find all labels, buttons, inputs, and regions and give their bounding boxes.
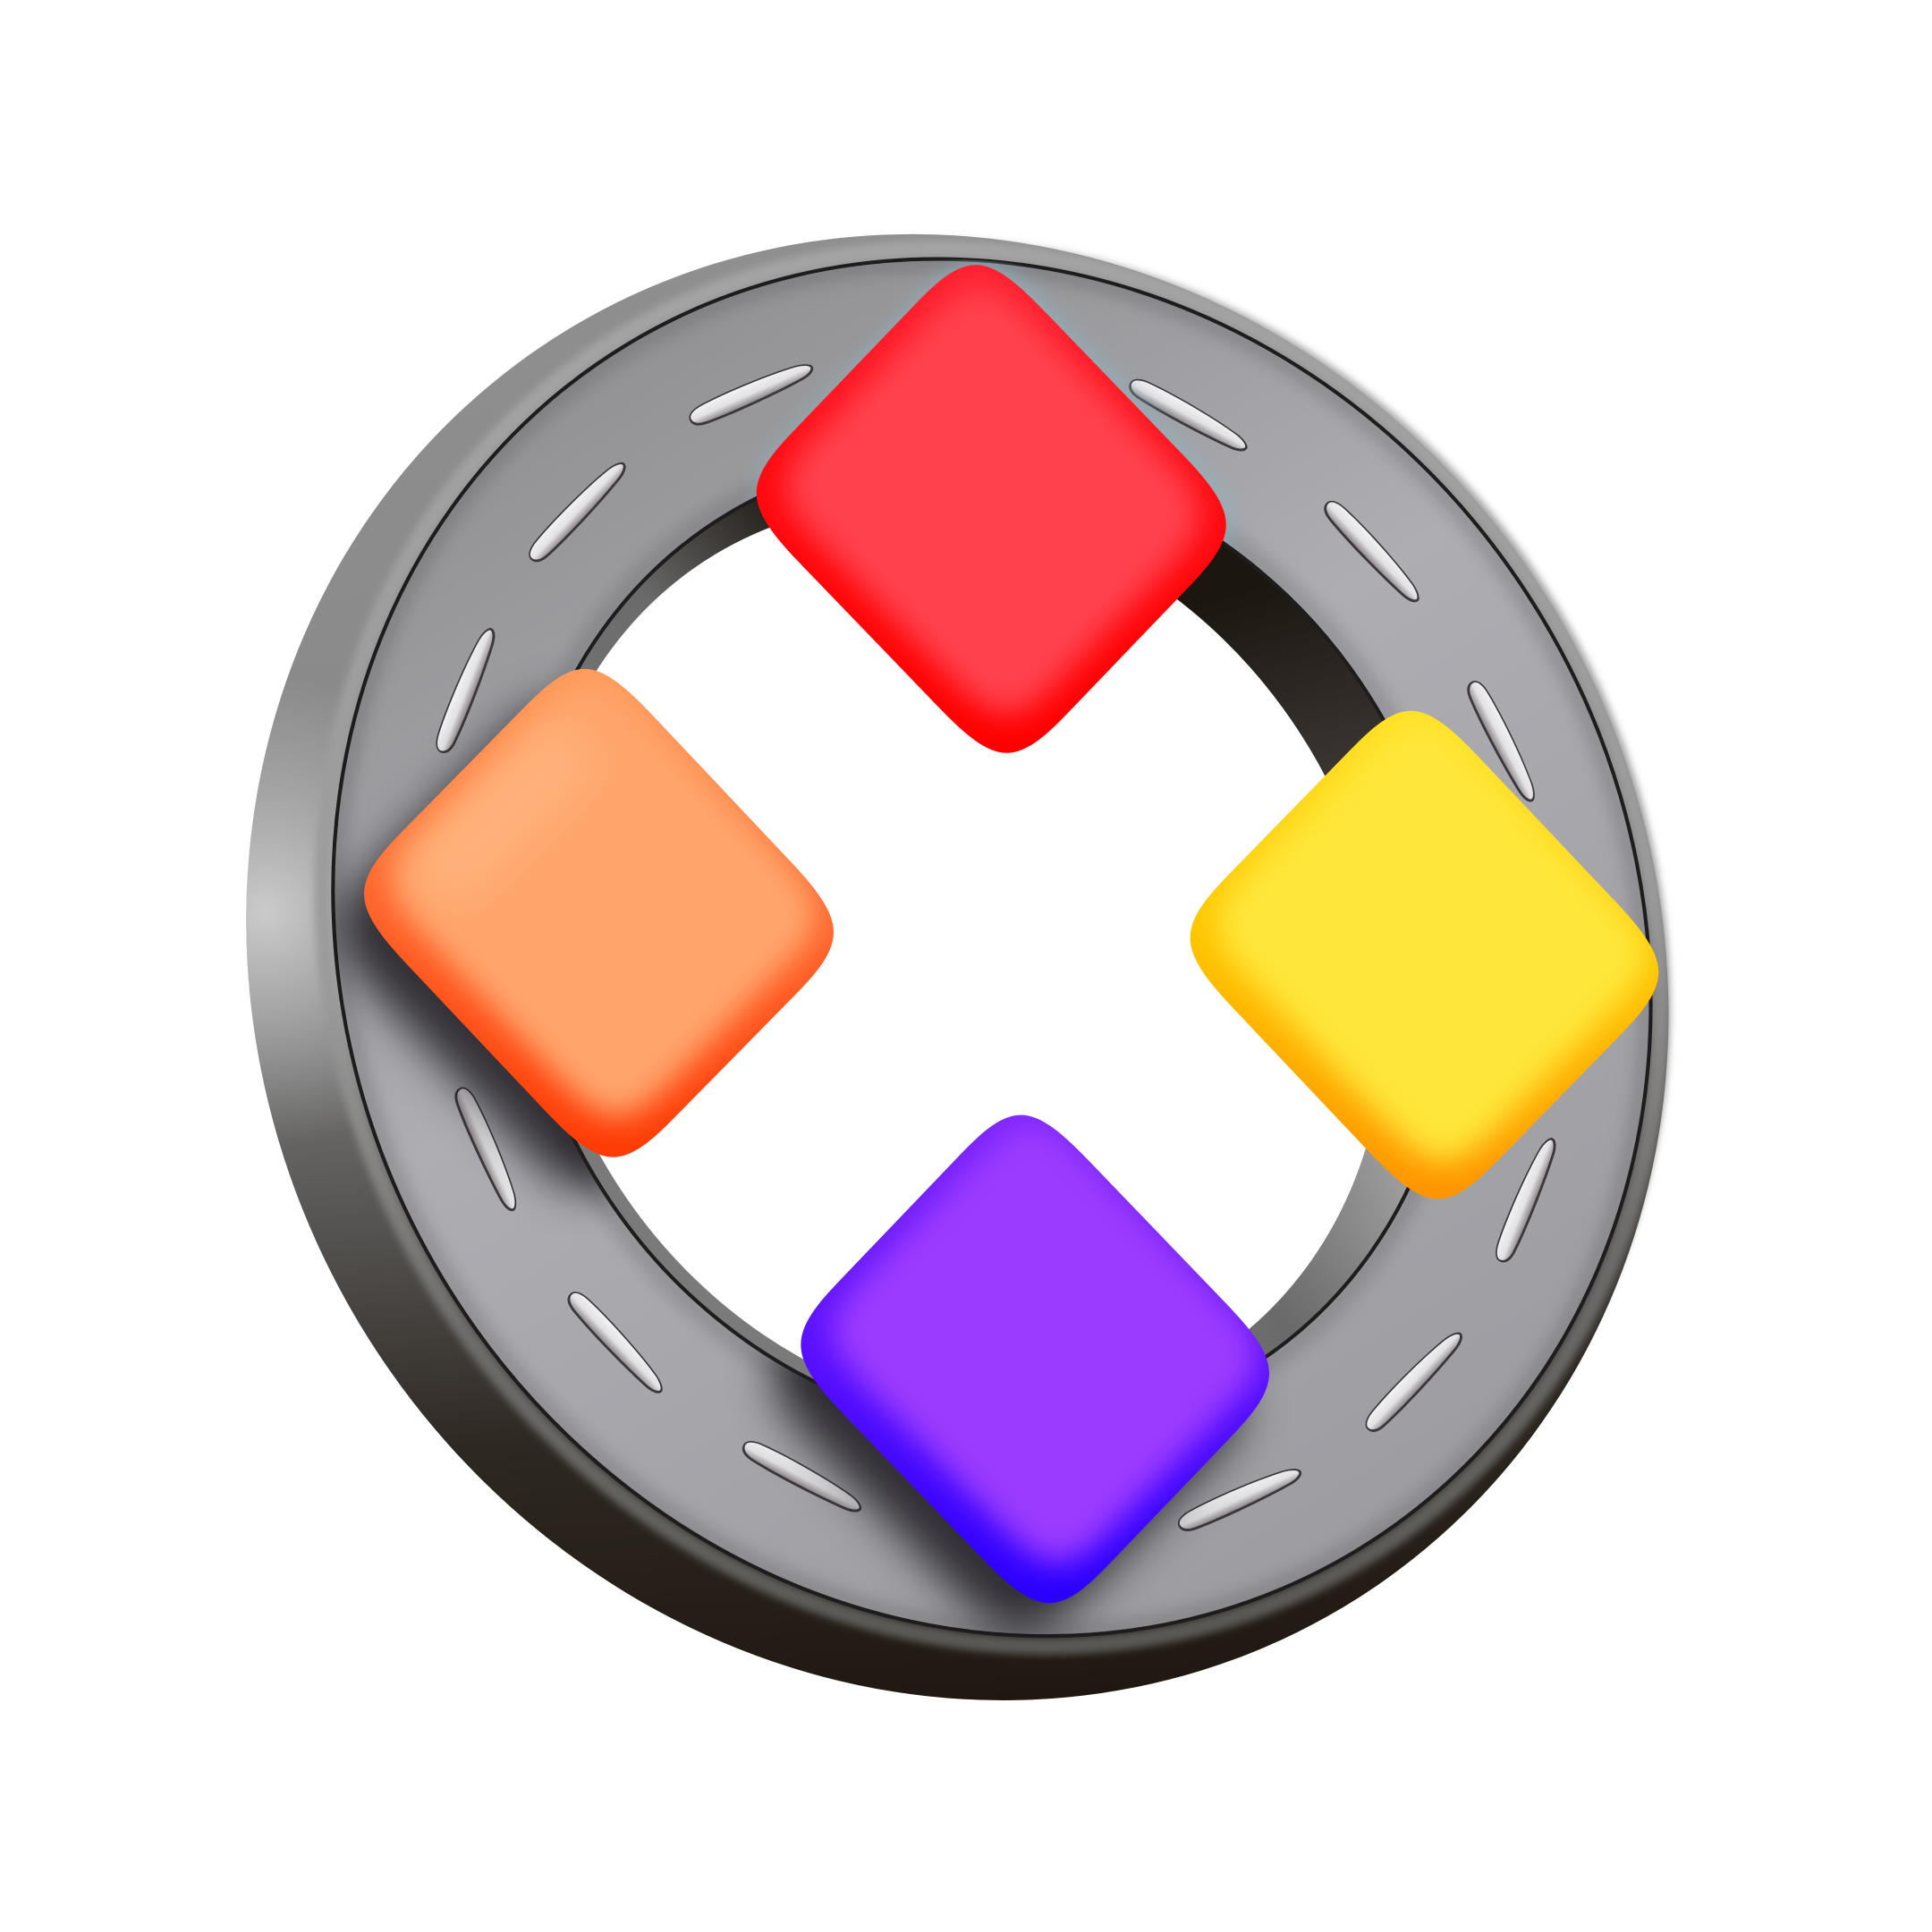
white stitches on the plate <box>431 356 1562 1537</box>
diamond shadows on the plate <box>326 247 1254 1648</box>
diamond: orange <box>364 669 834 1157</box>
ring inner wall <box>337 279 1634 1606</box>
ring front plate <box>331 258 1653 1639</box>
diamond: purple <box>789 1103 1282 1615</box>
ring centre hole <box>365 343 1552 1574</box>
diamond: red <box>757 265 1226 753</box>
diamond: yellow <box>1190 710 1658 1199</box>
